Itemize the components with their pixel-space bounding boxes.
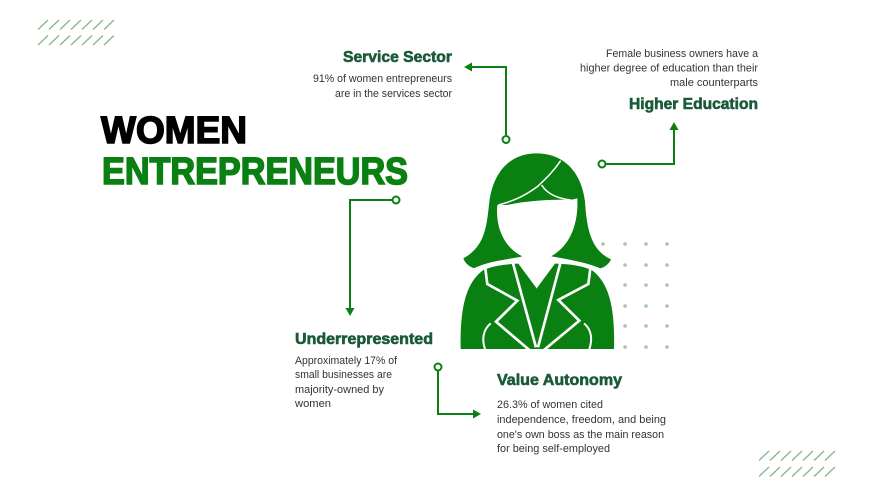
dot grid [601,242,669,349]
text block: underrepresented: majority-owned by [295,384,385,396]
text block: service sector: 91% of women entrepreneurs [313,73,452,85]
connector arrow: value autonomy [434,364,481,418]
text block: higher education [580,48,758,113]
text block: value autonomy: independence, freedom, and being [497,414,666,426]
text block: higher education: higher degree of education than their [580,62,758,74]
text block: service sector: Service Sector [343,49,452,66]
text block: higher education: male counterparts [670,77,758,89]
connector arrow: underrepresented [346,196,400,316]
text block: value autonomy: for being self-employed [497,443,610,455]
icon: businesswoman [461,153,614,350]
text block: underrepresented: small businesses are [295,369,392,381]
text block: value autonomy: one's own boss as the main reason [497,429,664,441]
text block: value autonomy: Value Autonomy [497,372,622,389]
decorative slashes: top left [38,20,114,45]
text block: higher education: Female business owners have a [606,48,758,60]
title: WOMEN [101,110,247,152]
connector arrow: service sector [464,62,510,143]
text block: service sector [313,49,452,100]
title [101,110,408,193]
text block: higher education: Higher Education [629,96,758,113]
text block: value autonomy [497,372,666,455]
text block: underrepresented: Underrepresented [295,331,433,348]
connector arrow: higher education [598,122,678,168]
text block: underrepresented: Approximately 17% of [295,355,397,367]
title: ENTREPRENEURS [102,151,408,193]
text block: underrepresented: women [294,398,331,410]
text block: underrepresented [294,331,433,410]
decorative slashes: bottom right [759,451,835,476]
text block: value autonomy: 26.3% of women cited [497,399,603,411]
text block: service sector: are in the services sector [335,88,452,100]
